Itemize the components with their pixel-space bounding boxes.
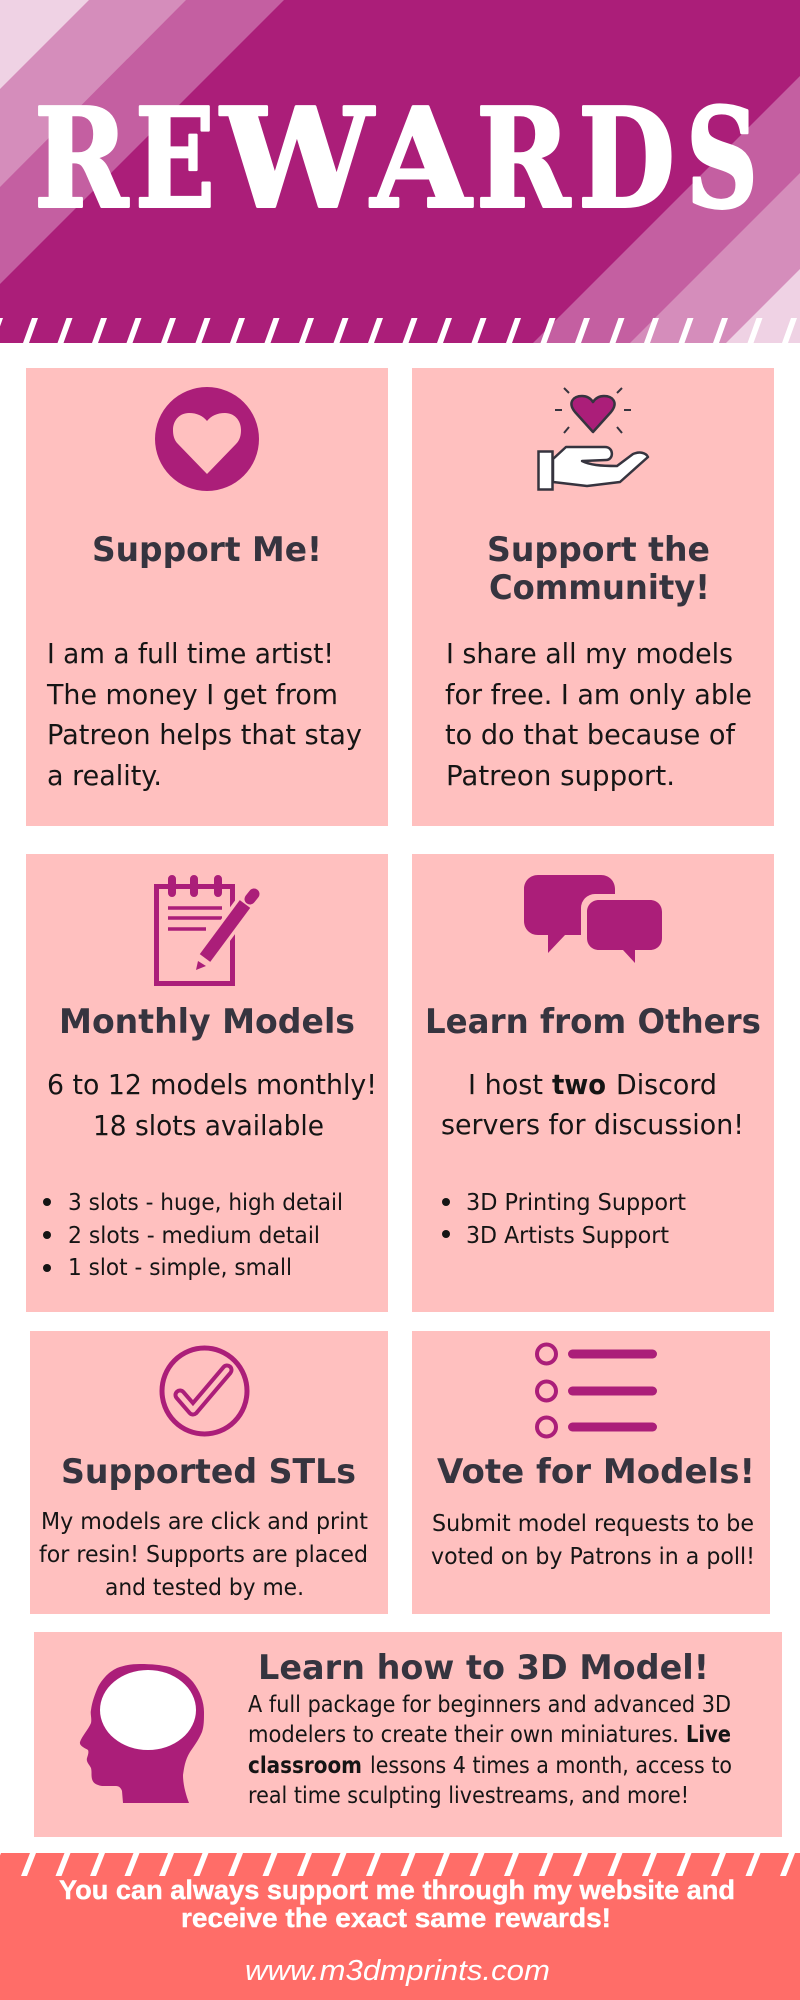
body text: My models are click and print: [41, 1509, 368, 1535]
heading: [487, 530, 710, 608]
bullet list: [43, 1188, 343, 1281]
body text: I am a full time artist!: [47, 638, 334, 670]
body text: lessons 4 times a month, access to: [370, 1753, 732, 1779]
title: A: [369, 78, 473, 240]
body text: [39, 1509, 368, 1601]
icon: head silhouette: [80, 1664, 204, 1803]
panel: vote for models: [412, 1331, 770, 1614]
bullet list: 3 slots - huge, high detail: [68, 1188, 343, 1216]
footer message: receive the exact same rewards!: [181, 1903, 611, 1933]
heading: Vote for Models!: [437, 1452, 755, 1492]
body text: modelers to create their own miniatures.: [248, 1722, 679, 1748]
header banner with diagonal stripes: [0, 0, 800, 343]
body text: Patreon support.: [446, 760, 675, 792]
icon: hand holding heart: [538, 388, 648, 490]
panel: learn from others: [412, 854, 774, 1312]
intro text: servers for discussion!: [441, 1109, 744, 1141]
body text: [445, 638, 752, 792]
body text: classroom: [248, 1753, 362, 1779]
heading: Support the: [487, 530, 710, 570]
title: [34, 78, 758, 240]
body text: I share all my models: [446, 638, 733, 670]
bullet list: 2 slots - medium detail: [68, 1221, 320, 1249]
bullet list: [442, 1188, 686, 1249]
intro text: 18 slots available: [93, 1110, 324, 1142]
heading: Monthly Models: [59, 1002, 355, 1042]
body text: Live: [686, 1722, 731, 1748]
website link: www.m3dmprints.com: [245, 1955, 550, 1987]
body text: to do that because of: [445, 719, 736, 751]
body text: and tested by me.: [105, 1575, 304, 1601]
bullet list: 1 slot - simple, small: [68, 1253, 292, 1281]
intro text: 6 to 12 models monthly!: [47, 1069, 377, 1101]
body text: [46, 638, 362, 792]
body text: for resin! Supports are placed: [39, 1542, 368, 1568]
title: R: [476, 78, 571, 240]
title: D: [578, 78, 675, 240]
bullet list: 3D Printing Support: [466, 1188, 686, 1216]
body text: [431, 1511, 755, 1570]
title: E: [135, 78, 215, 240]
title: R: [34, 78, 129, 240]
heading: Learn from Others: [425, 1002, 761, 1042]
intro text: Discord: [616, 1069, 717, 1101]
icon: check mark in circle: [162, 1348, 247, 1434]
footer banner: [0, 1853, 800, 2000]
intro text: I host: [468, 1069, 543, 1101]
intro text: [47, 1069, 377, 1142]
heading: Community!: [489, 568, 710, 608]
icon: notepad and pencil: [156, 879, 254, 984]
title: W: [219, 78, 375, 240]
body text: A full package for beginners and advanced 3D: [248, 1692, 731, 1718]
intro text: two: [552, 1069, 606, 1101]
heading: Learn how to 3D Model!: [258, 1648, 709, 1688]
body text: Patreon helps that stay: [47, 719, 362, 751]
body text: The money I get from: [46, 679, 338, 711]
body text: a reality.: [47, 760, 162, 792]
panel: support the community: [412, 368, 774, 826]
body text: Submit model requests to be: [432, 1511, 754, 1537]
footer message: [59, 1875, 735, 1933]
panel: learn how to 3D model: [34, 1632, 782, 1837]
heading: Support Me!: [92, 530, 322, 570]
panel: monthly models: [26, 854, 388, 1312]
title: S: [686, 78, 758, 240]
footer message: You can always support me through my website and: [59, 1875, 735, 1905]
icon: chat bubbles: [524, 875, 662, 963]
icon: heart in circle: [155, 387, 259, 491]
icon: list: [537, 1344, 657, 1436]
body text: voted on by Patrons in a poll!: [431, 1544, 755, 1570]
body text: real time sculpting livestreams, and more!: [248, 1783, 689, 1809]
panel: support me: [26, 368, 388, 826]
panel: supported STLs: [30, 1331, 388, 1614]
body text: [248, 1692, 732, 1809]
intro text: [441, 1069, 744, 1141]
bullet list: 3D Artists Support: [466, 1221, 669, 1249]
heading: Supported STLs: [61, 1452, 356, 1492]
body text: for free. I am only able: [445, 679, 752, 711]
